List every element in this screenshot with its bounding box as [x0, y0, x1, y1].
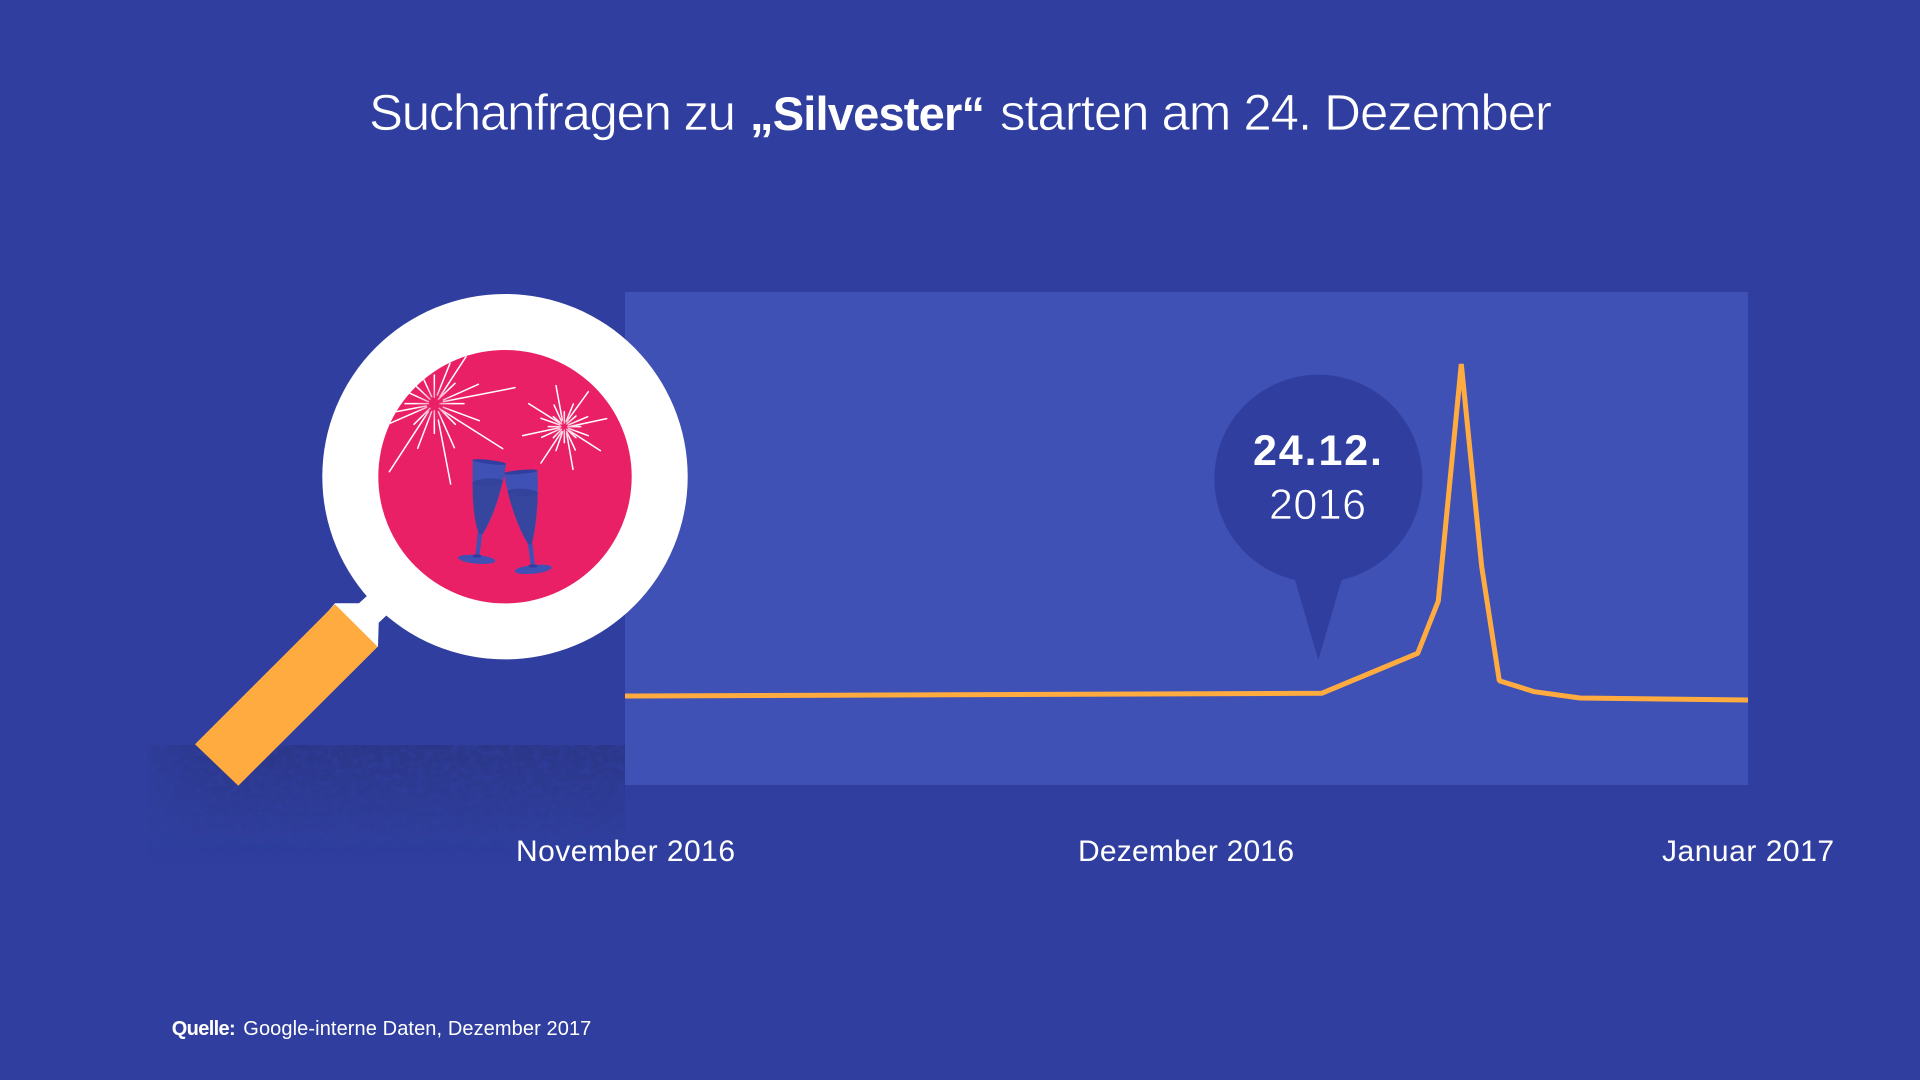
- left glass: [458, 458, 506, 565]
- magnifier ring: [322, 294, 688, 659]
- bubble date: 24.12.: [1253, 427, 1382, 475]
- firework burst left: [389, 357, 515, 484]
- source note: Google-interne Daten, Dezember 2017: [243, 1018, 591, 1040]
- source note: Quelle:: [172, 1018, 236, 1040]
- bubble year: 2016: [1269, 481, 1366, 529]
- trend line: [625, 364, 1748, 700]
- icon: magnifying glass: [195, 294, 688, 786]
- right glass: [504, 469, 552, 576]
- firework burst right: [523, 386, 607, 469]
- x-axis labels: Dezember 2016: [1078, 835, 1294, 868]
- bubble shape: [1214, 375, 1422, 660]
- title: „Silvester“: [750, 87, 985, 140]
- magnifier shadow: [156, 745, 625, 818]
- x-axis labels: [516, 835, 1834, 868]
- title: [369, 84, 1552, 141]
- magnifier handle: [195, 604, 378, 786]
- magnifier lens: [378, 350, 632, 603]
- fireworks: [389, 357, 607, 484]
- magnifier neck: [325, 595, 388, 652]
- callout: date bubble: [1214, 375, 1422, 660]
- x-axis labels: Januar 2017: [1662, 835, 1834, 868]
- title: Suchanfragen zu: [369, 84, 736, 141]
- champagne glasses: [458, 458, 552, 576]
- chart panel: [625, 292, 1748, 785]
- x-axis labels: November 2016: [516, 835, 735, 868]
- title: starten am 24. Dezember: [1000, 84, 1552, 141]
